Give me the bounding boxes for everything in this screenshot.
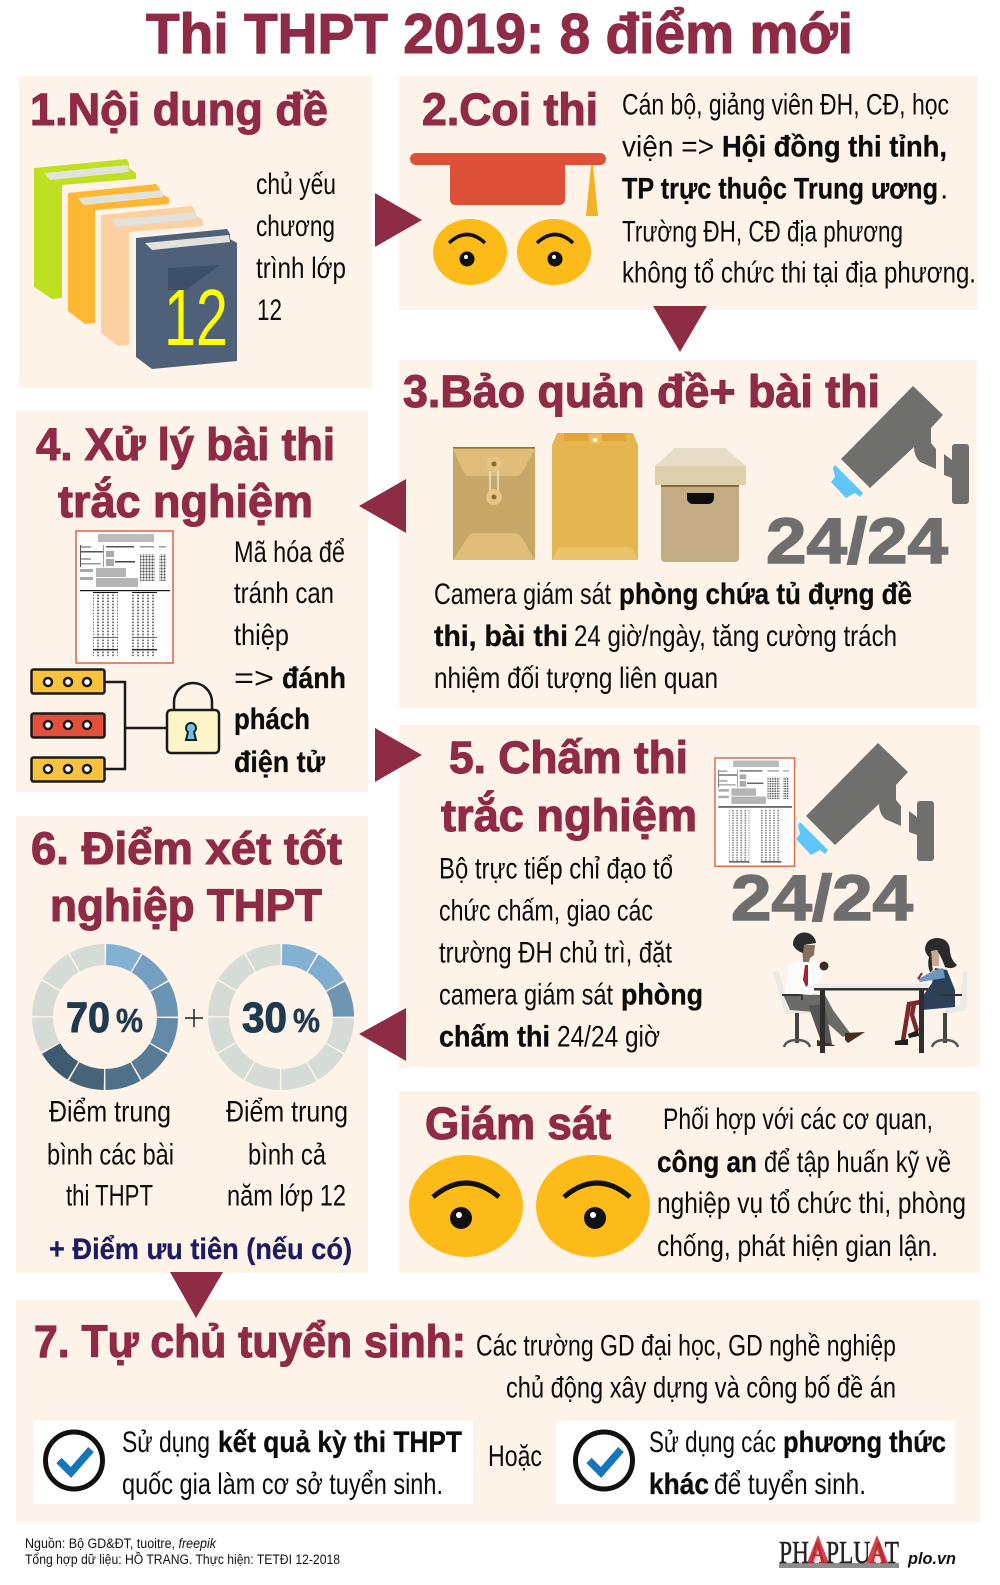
illustration: two people at a table (773, 932, 967, 1053)
text: option 2: phương thức (783, 1426, 946, 1459)
icon: large eyes (409, 1155, 650, 1257)
icon: stack of books (34, 159, 237, 369)
heading 5: trắc nghiệm (441, 790, 697, 841)
text: option 1 (122, 1426, 462, 1501)
icon: check mark (46, 1432, 102, 1489)
text: panel 5 body (439, 852, 703, 1054)
chart: 70% donut: 70 (66, 994, 110, 1042)
chart: 30% donut (195, 931, 367, 1103)
text: 70% label: thi THPT (66, 1180, 153, 1212)
heading 5 (441, 732, 697, 841)
icon: yellow envelope (552, 433, 638, 560)
text: giám sát body: công an (657, 1146, 757, 1179)
text: panel 1 body: 12 (257, 294, 282, 327)
text: panel 5 body: 24/24 giờ (557, 1020, 660, 1054)
heading 6: 6. Điểm xét tốt (31, 823, 342, 874)
option box: THPT results (34, 1421, 473, 1504)
text: 30% label: năm lớp 12 (227, 1180, 346, 1212)
text: panel 1 body: chủ yếu (256, 168, 336, 201)
text: option 2: khác (649, 1468, 709, 1501)
text: panel 3 body: nhiệm đối tượng liên quan (434, 662, 718, 695)
text: 30% label (226, 1096, 348, 1212)
text: 70% label (47, 1096, 174, 1212)
icon: string envelope (453, 447, 535, 560)
text: 24/24: 24/24 (731, 862, 913, 934)
icon: security camera (796, 743, 934, 861)
text: panel 2 body: Hội đồng thi tỉnh, (722, 130, 947, 164)
arrow: panel 3 to panel 4 (359, 479, 406, 533)
icon: graduation cap (410, 153, 606, 216)
icon: answer sheet small (715, 758, 795, 866)
text: panel 4 body: tránh can (234, 577, 334, 610)
text: panel 5 body: chấm thi (439, 1020, 550, 1054)
heading 6: nghiệp THPT (50, 880, 322, 931)
footer: sources: Tổng hợp dữ liệu: HỒ TRANG. Thực hiện: TETĐI 12-2018 (25, 1552, 340, 1567)
text: 70% label: bình các bài (47, 1138, 174, 1172)
text: panel 1 body (256, 168, 346, 327)
text: or: Hoặc (488, 1440, 542, 1473)
text: giám sát body (657, 1103, 966, 1263)
chart: 70% donut (19, 931, 191, 1103)
text: option 2: Sử dụng các (649, 1426, 776, 1459)
chart: 30% donut: 30 (242, 994, 287, 1042)
text: 30% label: Điểm trung (226, 1096, 348, 1128)
text: panel 3 body: Camera giám sát (434, 578, 612, 611)
text: panel 5 body: phòng (621, 978, 703, 1012)
text: option 2 (649, 1426, 946, 1501)
text: panel 7 intro (476, 1330, 896, 1404)
text: panel 3 body: phòng chứa tủ đựng đề (619, 578, 912, 611)
text: panel 5 body: Bộ trực tiếp chỉ đạo tổ (439, 852, 673, 886)
text: panel 2 body: TP trực thuộc Trung ương (622, 172, 938, 206)
text: giám sát body: chống, phát hiện gian lận. (657, 1230, 938, 1263)
panel 6: điểm xét tốt nghiệp (16, 816, 368, 1273)
text: panel 3 body: 24 giờ/ngày, tăng cường trách (574, 620, 897, 653)
arrow: panel 4 to panel 5 (375, 728, 422, 782)
text: 70% label: Điểm trung (49, 1096, 171, 1128)
text: panel 4 body: => (234, 662, 274, 695)
panel 2: coi thi (399, 76, 978, 310)
heading 6 (31, 823, 342, 931)
heading 3: 3.Bảo quản đề+ bài thi (403, 366, 880, 417)
heading 2: 2.Coi thi (422, 84, 598, 135)
text: option 2: để tuyển sinh. (714, 1468, 866, 1501)
text: option 1: Sử dụng (122, 1426, 210, 1459)
logo: Pháp Luật plo.vn: PHAPLUAT (779, 1534, 899, 1570)
icon: check mark (576, 1432, 632, 1489)
text: panel 5 body: trường ĐH chủ trì, đặt (439, 936, 673, 970)
text: panel 4 body: thiệp (234, 619, 289, 652)
arrow: panel 5 to panel 6 (359, 1008, 406, 1061)
icon: cardboard box (655, 448, 746, 562)
text: 24/24: 24/24 (766, 505, 948, 577)
option box: other methods (556, 1421, 955, 1504)
heading 4: 4. Xử lý bài thi (36, 419, 335, 470)
panel 3: bảo quản đề (399, 360, 977, 708)
chart: 30% donut: % (293, 1002, 320, 1039)
panel 4: xử lý bài thi trắc nghiệm (16, 411, 368, 792)
icon: eyes (433, 219, 591, 285)
heading 5: 5. Chấm thi (449, 732, 688, 783)
heading 4 (36, 419, 335, 527)
text: option 1: kết quả kỳ thi THPT (218, 1426, 462, 1459)
panel 1: nội dung đề (19, 76, 372, 388)
text: panel 7 intro: chủ động xây dựng và công bố đề án (506, 1372, 896, 1404)
arrow: panel 2 to panel 3 (653, 306, 707, 352)
text: panel 2 body: viện => (622, 130, 714, 164)
text: panel 1 body: trình lớp (256, 252, 346, 285)
text: panel 4 body: phách (234, 703, 310, 736)
icon: security camera (831, 386, 969, 504)
title: Thi THPT 2019: 8 điểm mới (146, 2, 853, 66)
text: panel 2 body (622, 88, 976, 290)
text: panel 4 body: đánh (282, 662, 346, 695)
chart: 70% donut: % (116, 1002, 143, 1039)
panel 7: tự chủ tuyển sinh (16, 1300, 980, 1522)
text: panel 3 body: thi, bài thi (434, 620, 568, 653)
heading 7: 7. Tự chủ tuyển sinh: (34, 1316, 466, 1367)
icon: servers and lock (32, 670, 219, 782)
panel 5: chấm thi trắc nghiệm (399, 725, 980, 1067)
arrow: panel 6 to panel 7 (170, 1272, 223, 1318)
text: panel 4 body: điện tử (234, 746, 325, 779)
text: panel 1 body: chương (256, 210, 335, 243)
text: panel 5 body: chức chấm, giao các (439, 894, 653, 928)
text: panel 4 body (234, 536, 346, 779)
text: priority points: + Điểm ưu tiên (nếu có) (49, 1233, 352, 1266)
text: panel 3 body (434, 578, 912, 695)
text: giám sát body: để tập huấn kỹ về (764, 1146, 951, 1179)
arrow: panel 1 to panel 2 (375, 193, 422, 247)
heading 4: trắc nghiệm (58, 476, 313, 527)
text: option 1: quốc gia làm cơ sở tuyển sinh. (122, 1468, 443, 1501)
text: 30% label: bình cả (248, 1138, 326, 1172)
text: panel 5 body: camera giám sát (439, 978, 614, 1012)
footer: sources (25, 1536, 340, 1567)
text: panel 2 body: . (940, 172, 948, 206)
icon: stack of books: 12 (164, 273, 228, 362)
text: panel 2 body: Trường ĐH, CĐ địa phương (622, 216, 903, 248)
text: panel 4 body: Mã hóa để (234, 536, 345, 569)
icon: answer sheet (76, 531, 173, 663)
logo: Pháp Luật plo.vn: plo.vn (907, 1549, 956, 1568)
heading: giám sát: Giám sát (425, 1098, 611, 1149)
heading 1: 1.Nội dung đề (30, 84, 328, 135)
panel: giám sát (399, 1091, 980, 1273)
icon: plus (185, 1009, 203, 1027)
footer: sources: Nguồn: Bộ GD&ĐT, tuoitre, freepik (25, 1536, 217, 1551)
